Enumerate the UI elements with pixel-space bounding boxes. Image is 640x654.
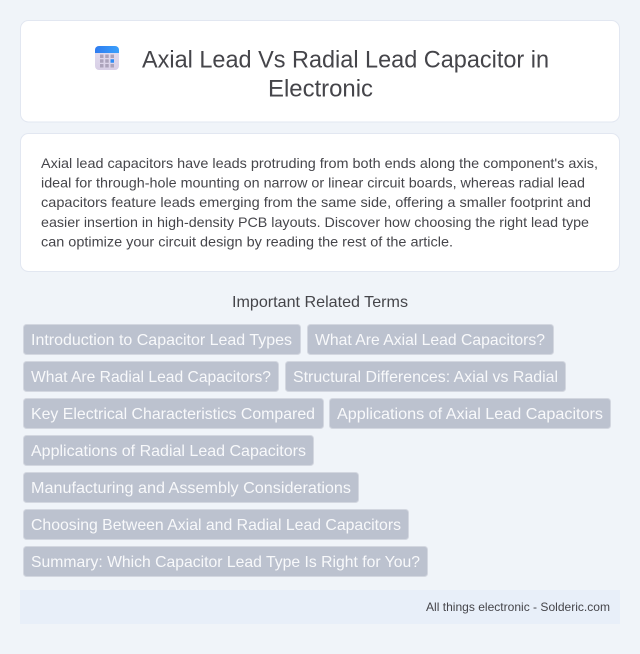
intro paragraph: Axial lead capacitors have leads protruding from both ends along the component's axis, [41, 155, 598, 171]
tag: axial applications: Applications of Axial Lead Capacitors [337, 406, 603, 423]
tag: structural differences [286, 362, 566, 392]
panel: introduction [20, 134, 620, 272]
tag: axial definition [308, 324, 554, 354]
tag: choosing: Choosing Between Axial and Radial Lead Capacitors [31, 517, 401, 534]
tag: structural differences: Structural Differences: Axial vs Radial [293, 369, 558, 386]
panel: title header [20, 20, 620, 122]
tag: axial applications [330, 398, 610, 428]
tag: manufacturing [24, 472, 358, 502]
tag: electrical characteristics [24, 398, 324, 428]
intro paragraph [41, 155, 598, 249]
tag: introduction [24, 324, 300, 354]
title [142, 46, 549, 102]
tag: radial definition: What Are Radial Lead Capacitors? [31, 369, 271, 386]
title: Axial Lead Vs Radial Lead Capacitor in [142, 46, 549, 74]
footer: All things electronic - Solderic.com [426, 600, 610, 614]
tag list [24, 324, 610, 576]
title: Electronic [268, 76, 373, 102]
intro paragraph: can optimize your circuit design by reading the rest of the article. [41, 233, 453, 249]
intro paragraph: ideal for through-hole mounting on narrow or linear circuit boards, whereas radial lead [41, 175, 585, 191]
intro paragraph: capacitors feature leads emerging from the same side, offering a smaller footprint and [41, 194, 591, 210]
tag: radial applications [24, 436, 314, 466]
tag: summary [24, 546, 428, 576]
intro paragraph: easier insertion in high-density PCB layouts. Discover how choosing the right lead type [41, 214, 589, 230]
tag: electrical characteristics: Key Electrical Characteristics Compared [31, 406, 315, 423]
tag: summary: Summary: Which Capacitor Lead Type Is Right for You? [31, 554, 420, 571]
tag: radial applications: Applications of Radial Lead Capacitors [31, 443, 306, 460]
tag: axial definition: What Are Axial Lead Capacitors? [315, 332, 545, 349]
tag: choosing [24, 510, 408, 540]
heading: related terms: Important Related Terms [232, 294, 408, 311]
tag: radial definition [24, 362, 278, 392]
icon: calendar [95, 46, 119, 70]
tag: manufacturing: Manufacturing and Assembly Considerations [31, 480, 351, 497]
tag: introduction: Introduction to Capacitor Lead Types [31, 332, 292, 349]
footer [20, 590, 620, 624]
